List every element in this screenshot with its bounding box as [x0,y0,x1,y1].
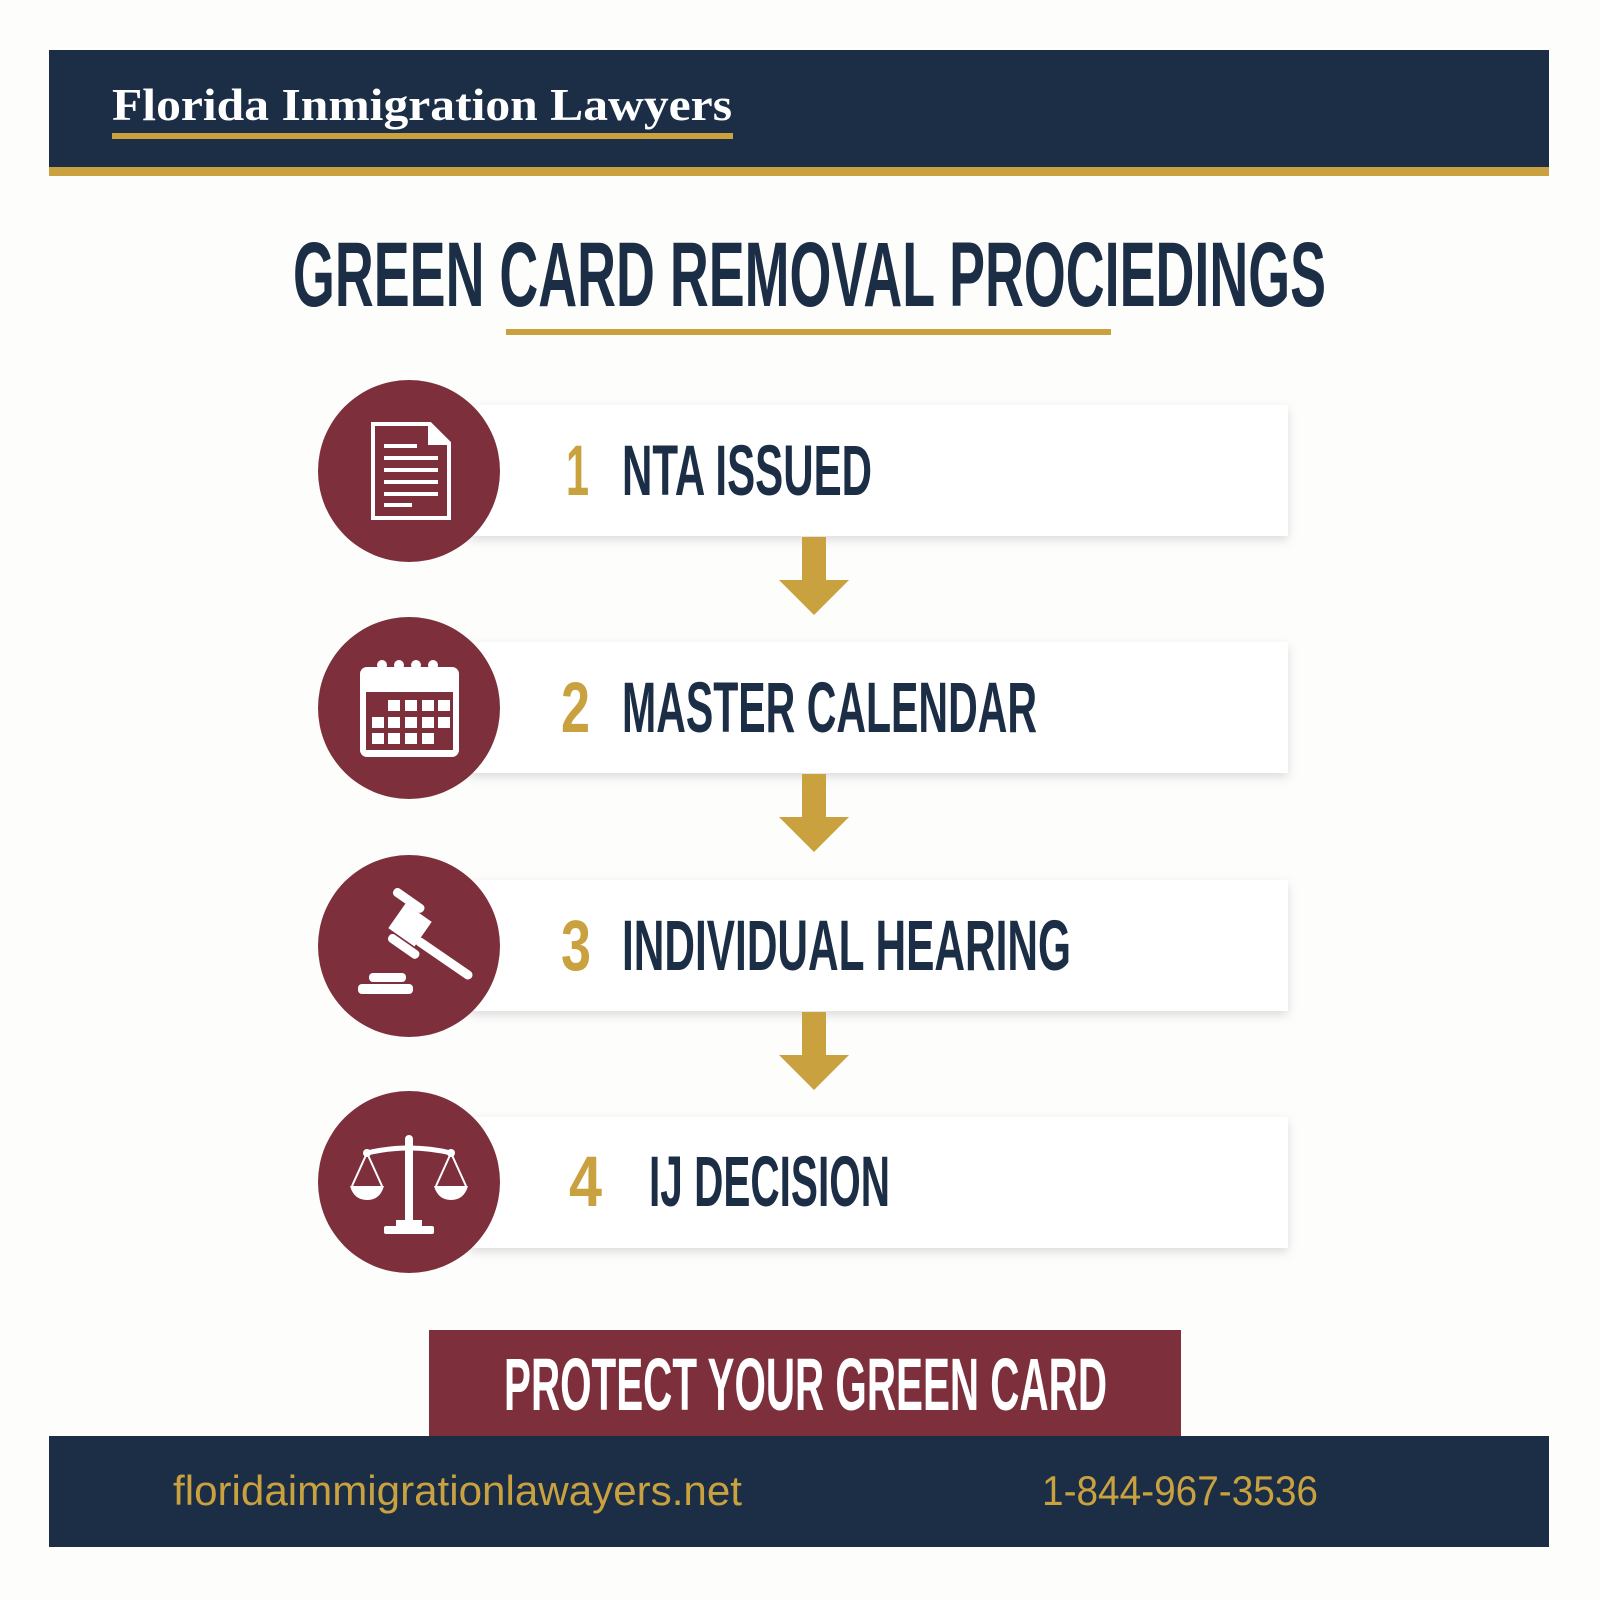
call to action banner: PROTECT YOUR GREEN CARD [504,1343,1107,1426]
step 4: 4 [569,1143,602,1222]
step 2 [318,617,1288,799]
step 3: INDIVIDUAL HEARING [622,907,1071,986]
step 4 [318,1091,1288,1273]
step 3: 3 [561,907,591,986]
footer bar [49,1436,1549,1547]
step 4: IJ DECISION [649,1143,890,1222]
brand underline [112,133,733,139]
step 1 [318,380,1288,562]
step 2: 2 [561,669,590,748]
step 1: NTA ISSUED [622,432,872,511]
title underline [506,329,1111,335]
call to action banner [429,1330,1181,1437]
icon: document [373,424,449,518]
icon: gavel [358,886,468,994]
phone: 1-844-967-3536 [1042,1467,1318,1514]
icon: scales [350,1135,468,1234]
step 3 [318,855,1288,1037]
brand name: Florida Inmigration Lawyers [112,79,732,130]
arrow 1 [779,537,849,615]
header bar [49,50,1549,176]
arrow 3 [779,1012,849,1090]
step 1: 1 [566,432,589,511]
step 2: MASTER CALENDAR [622,669,1037,748]
website: floridaimmigrationlawayers.net [173,1467,742,1514]
icon: calendar [360,660,459,757]
arrow 2 [779,774,849,852]
